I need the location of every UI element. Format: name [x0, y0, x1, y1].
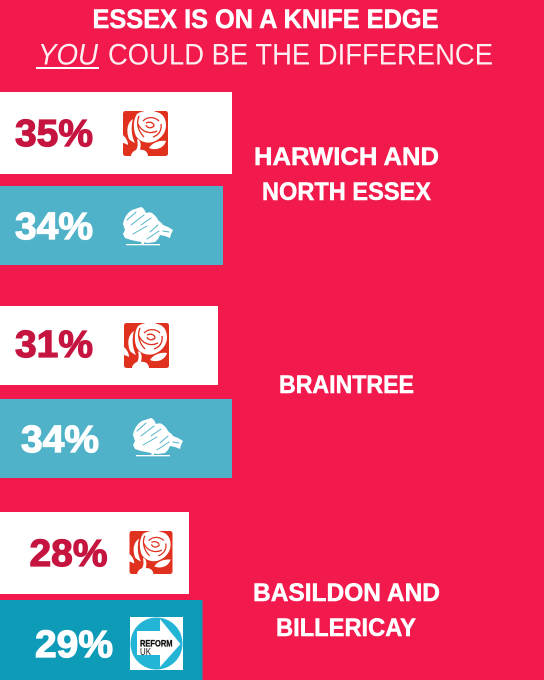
- panel: Harwich and North Essex: [0, 92, 439, 265]
- Labour bar 31%: [0, 306, 218, 385]
- constituency label: BASILDON AND: [253, 579, 440, 607]
- Conservative bar 34%: 34%: [15, 206, 93, 248]
- Reform UK bar 29%: 29%: [35, 624, 113, 666]
- icon: Conservative tree: [123, 207, 173, 245]
- Labour bar 35%: [0, 92, 232, 174]
- constituency label: [254, 143, 439, 206]
- constituency label: [253, 579, 440, 642]
- icon: Labour rose: [124, 323, 169, 368]
- icon: Reform UK logo: REFORM: [140, 638, 173, 650]
- panel: Braintree: [0, 306, 414, 478]
- title: [36, 4, 493, 72]
- icon: Reform UK logo: [130, 617, 183, 670]
- Labour bar 28%: 28%: [30, 533, 108, 575]
- title line two: YOU: [38, 38, 98, 72]
- constituency label: NORTH ESSEX: [262, 178, 431, 206]
- icon: Conservative tree: [133, 418, 183, 456]
- Labour bar 28%: [0, 512, 189, 594]
- title line two: COULD BE THE DIFFERENCE: [108, 38, 493, 72]
- Reform UK bar 29%: [0, 600, 202, 680]
- Labour bar 31%: 31%: [15, 324, 93, 366]
- icon: Labour rose: [123, 111, 168, 156]
- constituency label: BILLERICAY: [276, 614, 416, 642]
- Conservative bar 34%: [0, 186, 223, 265]
- panel: Basildon and Billericay: [0, 512, 440, 680]
- Conservative bar 34%: 34%: [21, 419, 99, 461]
- icon: Reform UK logo: UK: [140, 647, 151, 658]
- Labour bar 35%: 35%: [15, 113, 93, 155]
- constituency label: BRAINTREE: [279, 371, 414, 399]
- constituency label: HARWICH AND: [254, 143, 439, 171]
- title line one: ESSEX IS ON A KNIFE EDGE: [92, 4, 438, 34]
- Conservative bar 34%: [0, 399, 232, 478]
- icon: Labour rose: [130, 531, 172, 574]
